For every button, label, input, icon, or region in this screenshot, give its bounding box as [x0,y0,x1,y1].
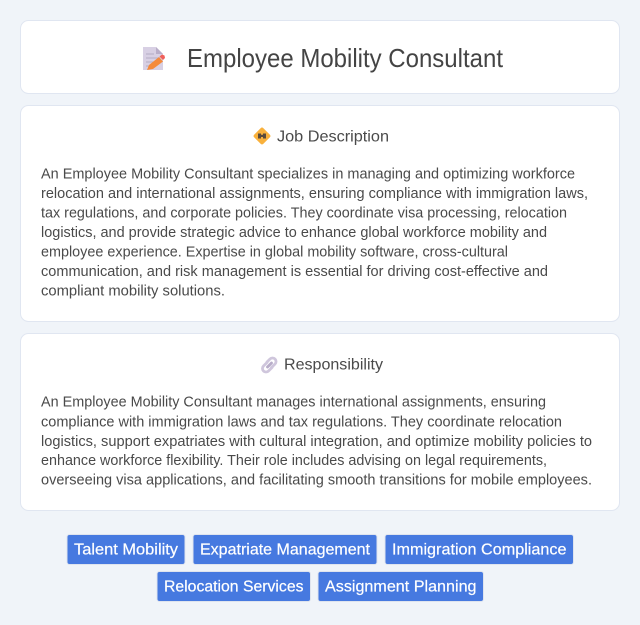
icon: document with pencil [143,47,165,70]
title: Employee Mobility Consultant [187,45,503,73]
text block: responsibility: compliance with immigration laws and tax regulations. They coordinate relocation [41,414,562,430]
text block: job description: An Employee Mobility Consultant specializes in managing and optimizing workforce [41,166,575,182]
text block: job description: logistics, and provide strategic advice to enhance global workforce mobility and [41,225,547,241]
icon: orange diamond [253,127,271,145]
tag: Expatriate Management: Expatriate Management [200,542,371,558]
text block: job description [41,166,588,300]
tag: Relocation Services: Relocation Services [164,578,304,596]
text block: job description: tax regulations, and corporate policies. They coordinate visa processing, relocation [41,206,567,222]
text block: responsibility: logistics, support expatriates with cultural integration, and optimize mobility policies to [41,434,592,450]
tag: Talent Mobility [67,534,185,564]
tag: Talent Mobility: Talent Mobility [74,542,178,558]
tag: Immigration Compliance [385,534,574,564]
icon: chain link [262,358,276,372]
tag: Immigration Compliance: Immigration Compliance [392,542,567,558]
text block: responsibility [41,394,592,488]
tag: Assignment Planning: Assignment Planning [325,578,476,596]
text block: job description: relocation and international assignments, ensuring compliance with immigration laws, [41,186,588,202]
tag: Assignment Planning [318,572,484,602]
text block: job description: communication, and risk management is essential for driving cost-effective and [41,264,548,280]
text block: responsibility: An Employee Mobility Consultant manages international assignments, ensuring [41,394,546,410]
heading: job description: Job Description [277,128,389,146]
text block: responsibility: overseeing visa applications, and facilitating smooth transitions for mobile employees. [41,472,592,488]
panel: job description [20,106,620,322]
heading: responsibility: Responsibility [284,356,383,374]
text block: responsibility: enhance workforce flexibility. Their role includes advising on legal requirements, [41,453,547,469]
text block: job description: employee experience. Expertise in global mobility software, cross-cultural [41,244,508,260]
tag: Relocation Services [157,572,310,602]
panel: responsibility [20,334,620,510]
text block: job description: compliant mobility solutions. [41,284,225,300]
tag: Expatriate Management [193,534,377,564]
panel: title card [20,20,620,94]
